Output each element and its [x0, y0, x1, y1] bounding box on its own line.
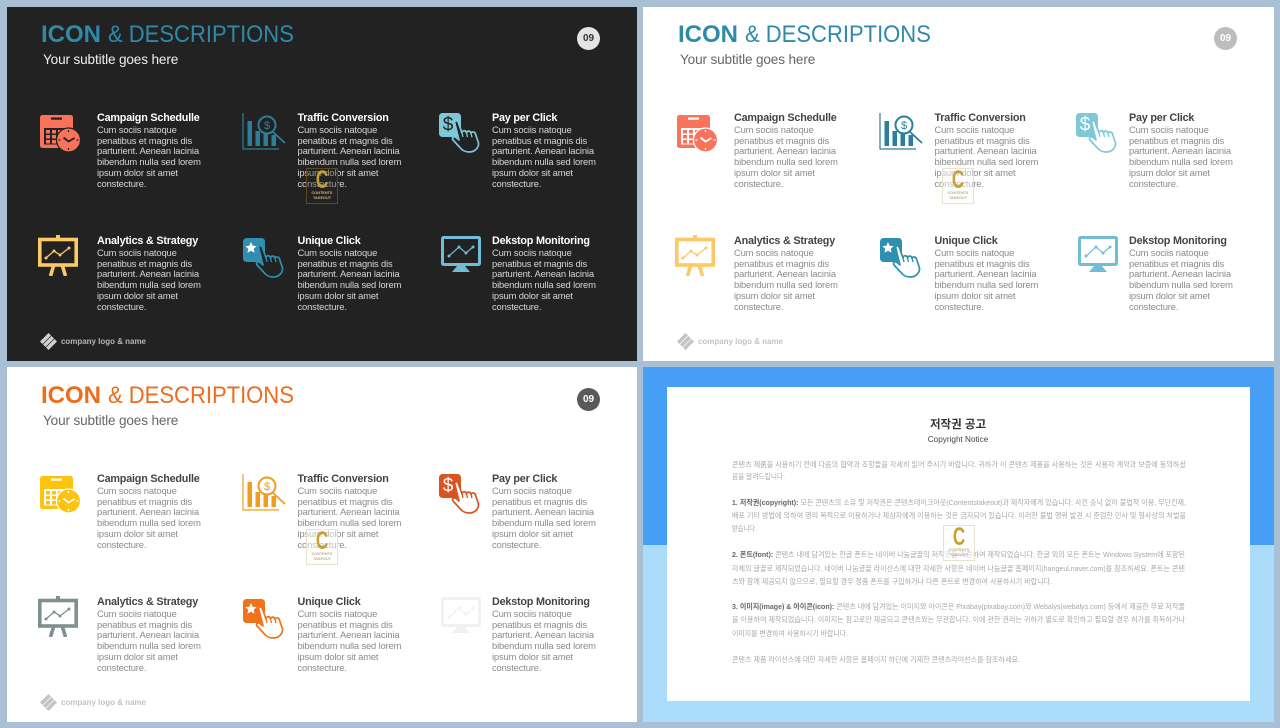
watermark: CONTENTS [948, 191, 968, 195]
icon: calendar with clock [40, 115, 80, 152]
item text: parturient. Aenean lacinia [97, 268, 199, 279]
item text: penatibus et magnis dis [492, 619, 587, 630]
item text: parturient. Aenean lacinia [298, 506, 399, 517]
item text: parturient. Aenean lacinia [492, 268, 594, 279]
item text: Cum sociis natoque [492, 124, 572, 135]
item text: constecture. [298, 301, 347, 312]
item text: Campaign Schedulle [734, 112, 837, 124]
item text: parturient. Aenean lacinia [934, 268, 1036, 279]
item text: penatibus et magnis dis [492, 496, 587, 507]
icon: chart with magnifier: $ [264, 481, 270, 493]
item text: penatibus et magnis dis [934, 258, 1030, 269]
page number badge [577, 388, 600, 410]
page number badge [577, 26, 600, 50]
item text: constecture. [492, 539, 541, 550]
item text: penatibus et magnis dis [298, 619, 393, 630]
notice heading: 저작권 공고 [930, 417, 986, 431]
item text: penatibus et magnis dis [934, 135, 1030, 146]
item text: penatibus et magnis dis [298, 258, 393, 269]
icon: monitor with line chart [441, 236, 481, 272]
item text [1129, 235, 1233, 312]
item: pay per click [1076, 112, 1233, 189]
subtitle: Your subtitle goes here [43, 413, 178, 428]
item text [492, 112, 596, 189]
item text: Cum sociis natoque [298, 247, 377, 258]
item text: Cum sociis natoque [97, 608, 177, 619]
item text: bibendum nulla sed lorem [298, 279, 401, 290]
title: & DESCRIPTIONS [108, 382, 294, 409]
notice body text: 자체의 글꼴로 제작되었습니다. 네이버 나눔글꼴 라이선스에 대한 자세한 사항은 네이버 나눔글꼴 홈페이지(hangeul.naver.com)를 참조하세요. 폰트는 콘텐 [732, 564, 1185, 573]
item text: constecture. [734, 301, 783, 312]
item text: bibendum nulla sed lorem [1129, 279, 1233, 290]
item text: ipsum dolor sit amet [492, 167, 573, 178]
icon: dollar button with hand: $ [1080, 114, 1091, 136]
notice body text: 콘텐츠 제품 라이선스에 대한 자세한 사항은 홈페이지 하단에 기재한 콘텐츠라이선스를 참조하세요. [732, 655, 1020, 664]
page number badge: 09 [583, 394, 594, 404]
item text [492, 235, 596, 312]
item text: constecture. [298, 662, 347, 673]
item text: penatibus et magnis dis [298, 135, 393, 146]
item text: bibendum nulla sed lorem [492, 156, 596, 167]
item text: ipsum dolor sit amet [734, 290, 815, 301]
item text: penatibus et magnis dis [298, 496, 393, 507]
item text: parturient. Aenean lacinia [97, 506, 199, 517]
item text: Cum sociis natoque [97, 124, 177, 135]
item text: parturient. Aenean lacinia [298, 268, 399, 279]
icon: monitor with line chart [441, 597, 481, 633]
item text: Traffic Conversion [934, 112, 1026, 124]
item text: Unique Click [298, 596, 360, 608]
notice card [667, 387, 1250, 701]
page number badge: 09 [583, 32, 594, 44]
item text: parturient. Aenean lacinia [298, 629, 399, 640]
icon: monitor with line chart [1078, 236, 1118, 272]
watermark: CONTENTS [312, 552, 332, 556]
item text: Analytics & Strategy [734, 235, 835, 247]
item text: Cum sociis natoque [1129, 124, 1209, 135]
item text [934, 235, 1038, 312]
item text [97, 596, 222, 676]
item text: bibendum nulla sed lorem [492, 640, 596, 651]
item text: penatibus et magnis dis [492, 258, 587, 269]
item text: parturient. Aenean lacinia [934, 145, 1036, 156]
item: desktop monitoring [1078, 235, 1233, 312]
icon: chart with magnifier [242, 113, 286, 150]
item: campaign schedulle [40, 112, 201, 189]
item text: bibendum nulla sed lorem [298, 517, 401, 528]
item: desktop monitoring [441, 235, 596, 312]
item text: ipsum dolor sit amet [97, 528, 178, 539]
watermark [306, 529, 338, 565]
notice body text: 배포 기타 방법에 의하여 영리 목적으로 이용하거나 제삼자에게 이용하는 것은 금지되어 있습니다. 이러한 불법 행위 발견 시 준엄한 민사 및 형사상의 처벌을 [732, 511, 1186, 520]
notice body text: 음을 알려드립니다. [732, 472, 785, 481]
panel: white slide, teal title [643, 7, 1274, 361]
panel: copyright notice [643, 367, 1274, 722]
item: pay per click [439, 112, 596, 189]
item: traffic conversion [879, 112, 1038, 189]
title: & DESCRIPTIONS [745, 21, 931, 48]
panel: dark slide [7, 7, 637, 361]
item text: bibendum nulla sed lorem [492, 279, 596, 290]
notice subheading: Copyright Notice [928, 435, 989, 444]
icon: chart with magnifier: $ [901, 120, 907, 132]
item text: constecture. [934, 301, 984, 312]
item text: Pay per Click [1129, 112, 1194, 124]
item text: penatibus et magnis dis [97, 135, 192, 146]
item text: penatibus et magnis dis [734, 258, 829, 269]
watermark: TAKEOUT [950, 552, 968, 556]
item text: constecture. [934, 178, 984, 189]
item text: constecture. [97, 301, 146, 312]
icon: chart with magnifier: $ [264, 120, 270, 132]
company logo [40, 694, 160, 712]
item: unique click [240, 595, 420, 679]
item text: bibendum nulla sed lorem [97, 279, 201, 290]
item text: Pay per Click [492, 473, 557, 485]
item text: Unique Click [298, 235, 360, 247]
icon: dollar button with hand: $ [443, 114, 454, 136]
item text [492, 596, 617, 676]
icon: presentation easel [38, 596, 78, 637]
watermark [942, 168, 974, 204]
item text: Cum sociis natoque [934, 124, 1014, 135]
item text: ipsum dolor sit amet [934, 290, 1015, 301]
item text: Unique Click [934, 235, 998, 247]
item: traffic conversion [242, 112, 401, 189]
item text: Analytics & Strategy [97, 235, 198, 247]
item text: Traffic Conversion [298, 112, 389, 124]
panel: white slide, orange title [7, 367, 637, 722]
item text [97, 235, 201, 312]
icon: star button with hand [243, 238, 284, 278]
item text: ipsum dolor sit amet [934, 167, 1015, 178]
icon: chart with magnifier [879, 113, 923, 150]
icon: dollar button with hand [439, 474, 480, 514]
item text: constecture. [492, 662, 541, 673]
subtitle: Your subtitle goes here [680, 52, 815, 67]
item text [734, 235, 838, 312]
item text [97, 112, 201, 189]
item: campaign schedulle [677, 112, 838, 189]
title [41, 381, 295, 411]
item text: Cum sociis natoque [97, 247, 177, 258]
item text: constecture. [1129, 178, 1178, 189]
item text: ipsum dolor sit amet [492, 651, 573, 662]
item: traffic conversion [240, 472, 420, 556]
item text: Cum sociis natoque [492, 247, 572, 258]
item text [298, 596, 422, 676]
item text: Analytics & Strategy [97, 596, 198, 608]
item text: penatibus et magnis dis [734, 135, 829, 146]
item text: ipsum dolor sit amet [298, 651, 378, 662]
notice body text: 1. 저작권(copyright): 모든 콘텐츠의 소유 및 저작권은 콘텐츠테이크아웃(Contentstakeout)과 제작자에게 있습니다. 사전 승낙 없이 불법적 이용, 무단전재, [732, 498, 1186, 507]
notice body text: 을 이용하여 제작되었습니다. 이미지는 참고로만 제공되고 콘텐츠와는 무관합니다. 이에 관한 권리는 귀하가 별도로 확인하고 필요할 경우 허가를 취득하거나 [732, 615, 1185, 624]
item text: Campaign Schedulle [97, 473, 200, 485]
watermark: TAKEOUT [313, 556, 331, 560]
item text: penatibus et magnis dis [492, 135, 587, 146]
item: analytics and strategy [37, 595, 217, 679]
item text [1129, 112, 1233, 189]
item text: penatibus et magnis dis [97, 258, 192, 269]
item text: Cum sociis natoque [934, 247, 1014, 258]
watermark: CONTENTS [312, 191, 332, 195]
item text [492, 473, 617, 553]
item text: bibendum nulla sed lorem [734, 156, 838, 167]
item: desktop monitoring [437, 595, 617, 679]
icon: presentation easel [38, 235, 78, 276]
item text: bibendum nulla sed lorem [734, 279, 838, 290]
watermark: TAKEOUT [313, 196, 331, 200]
item text: parturient. Aenean lacinia [492, 629, 594, 640]
icon: star button with hand [880, 238, 920, 278]
notice body text: 받습니다. [732, 524, 757, 533]
item: unique click [880, 235, 1038, 312]
title: ICON [41, 21, 101, 48]
notice body text: 이미지를 변경하여 사용하시기 바랍니다. [732, 629, 848, 638]
item: analytics and strategy [675, 235, 838, 312]
item text: Cum sociis natoque [1129, 247, 1209, 258]
item text: bibendum nulla sed lorem [934, 156, 1038, 167]
item: unique click [243, 235, 401, 312]
item: campaign schedulle [37, 472, 217, 556]
icon: presentation easel [675, 235, 715, 276]
item text: ipsum dolor sit amet [97, 651, 178, 662]
icon: calendar with clock [677, 115, 717, 152]
item text: parturient. Aenean lacinia [1129, 268, 1231, 279]
item text: constecture. [298, 178, 347, 189]
item text: constecture. [97, 662, 146, 673]
item text: constecture. [734, 178, 783, 189]
item text: ipsum dolor sit amet [97, 290, 178, 301]
item: pay per click [437, 472, 617, 556]
item text: ipsum dolor sit amet [298, 167, 378, 178]
icon: calendar with clock [40, 476, 81, 514]
watermark: TAKEOUT [949, 196, 967, 200]
item text [97, 473, 222, 553]
item text: constecture. [1129, 301, 1178, 312]
item text: Cum sociis natoque [734, 124, 814, 135]
icon: chart with magnifier [242, 474, 286, 512]
icon: dollar button with hand [1076, 113, 1116, 153]
item text: ipsum dolor sit amet [492, 528, 573, 539]
item text: Cum sociis natoque [298, 485, 377, 496]
title: ICON [678, 21, 738, 48]
item text: Dekstop Monitoring [492, 235, 590, 247]
item text: penatibus et magnis dis [97, 619, 192, 630]
item text: bibendum nulla sed lorem [97, 640, 201, 651]
item text: parturient. Aenean lacinia [97, 145, 199, 156]
item text: Campaign Schedulle [97, 112, 200, 124]
item text: Cum sociis natoque [734, 247, 814, 258]
item text: Cum sociis natoque [298, 608, 377, 619]
notice body text [732, 460, 1186, 664]
item text [734, 112, 838, 189]
item text: bibendum nulla sed lorem [1129, 156, 1233, 167]
item text: penatibus et magnis dis [1129, 135, 1224, 146]
title: & DESCRIPTIONS [108, 21, 294, 48]
icon: dollar button with hand [439, 113, 480, 153]
title: ICON [41, 382, 101, 409]
item text: constecture. [298, 539, 347, 550]
item text: ipsum dolor sit amet [492, 290, 573, 301]
watermark [943, 525, 975, 561]
item text: bibendum nulla sed lorem [298, 156, 401, 167]
page number badge [1214, 26, 1237, 50]
item text: Cum sociis natoque [298, 124, 377, 135]
item text: bibendum nulla sed lorem [298, 640, 401, 651]
company logo: company logo & name [61, 698, 146, 707]
item text: Dekstop Monitoring [1129, 235, 1227, 247]
item text: parturient. Aenean lacinia [734, 145, 836, 156]
notice body text: 콘텐츠 제품을 사용하기 전에 다음의 협약과 조항들을 자세히 읽어 주시기 바랍니다. 귀하가 이 콘텐츠 제품을 사용하는 것은 사용자 계약과 보증에 동의하셨 [732, 460, 1186, 469]
company logo: company logo & name [61, 337, 146, 346]
item text: Dekstop Monitoring [492, 596, 590, 608]
item text: bibendum nulla sed lorem [492, 517, 596, 528]
item text: parturient. Aenean lacinia [492, 145, 594, 156]
item text: Cum sociis natoque [492, 608, 572, 619]
item text [298, 473, 422, 553]
subtitle: Your subtitle goes here [43, 52, 178, 67]
page number badge: 09 [1220, 32, 1231, 44]
icon: star button with hand [243, 599, 284, 639]
item text: ipsum dolor sit amet [734, 167, 815, 178]
item text [298, 112, 401, 189]
item text: Pay per Click [492, 112, 557, 124]
item text: Cum sociis natoque [492, 485, 572, 496]
item text: bibendum nulla sed lorem [934, 279, 1038, 290]
item text: parturient. Aenean lacinia [298, 145, 399, 156]
item text: ipsum dolor sit amet [298, 290, 378, 301]
item text: constecture. [97, 178, 146, 189]
item text: constecture. [492, 178, 541, 189]
item text: constecture. [492, 301, 541, 312]
company logo [40, 333, 146, 350]
item text: parturient. Aenean lacinia [1129, 145, 1231, 156]
item text: parturient. Aenean lacinia [97, 629, 199, 640]
icon: dollar button with hand: $ [443, 476, 454, 496]
item text: ipsum dolor sit amet [1129, 290, 1210, 301]
item text [298, 235, 401, 312]
item text: ipsum dolor sit amet [1129, 167, 1210, 178]
item text [934, 112, 1038, 189]
notice body text: 3. 이미지(image) & 아이콘(icon): 콘텐츠 내에 담겨있는 이미지와 아이콘은 Pixabay(pixabay.com)와 Webalys(webalys.com) 등에서 제공한 무료 저작물 [732, 602, 1185, 611]
notice body text: 츠와 함께 제공되지 않으므로, 필요할 경우 정품 폰트를 구입하거나 다른 폰트로 변경하여 사용하시기 바랍니다. [732, 577, 1052, 586]
item text: ipsum dolor sit amet [298, 528, 378, 539]
item text: Cum sociis natoque [97, 485, 177, 496]
item text: Traffic Conversion [298, 473, 389, 485]
item text: bibendum nulla sed lorem [97, 517, 201, 528]
item text: parturient. Aenean lacinia [734, 268, 836, 279]
notice body text: 2. 폰트(font): 콘텐츠 내에 담겨있는 한글 폰트는 네이버 나눔글꼴의 저작권을 기증하여 제작되었습니다. 한글 외의 모든 폰트는 Windows System에 포함된 [732, 550, 1185, 559]
watermark: CONTENTS [949, 548, 969, 552]
item text: bibendum nulla sed lorem [97, 156, 201, 167]
item text: parturient. Aenean lacinia [492, 506, 594, 517]
item: analytics and strategy [38, 235, 201, 312]
item text: constecture. [97, 539, 146, 550]
watermark [306, 168, 338, 204]
item text: penatibus et magnis dis [1129, 258, 1224, 269]
item text: penatibus et magnis dis [97, 496, 192, 507]
company logo [677, 333, 783, 350]
company logo: company logo & name [698, 337, 783, 346]
item text: ipsum dolor sit amet [97, 167, 178, 178]
